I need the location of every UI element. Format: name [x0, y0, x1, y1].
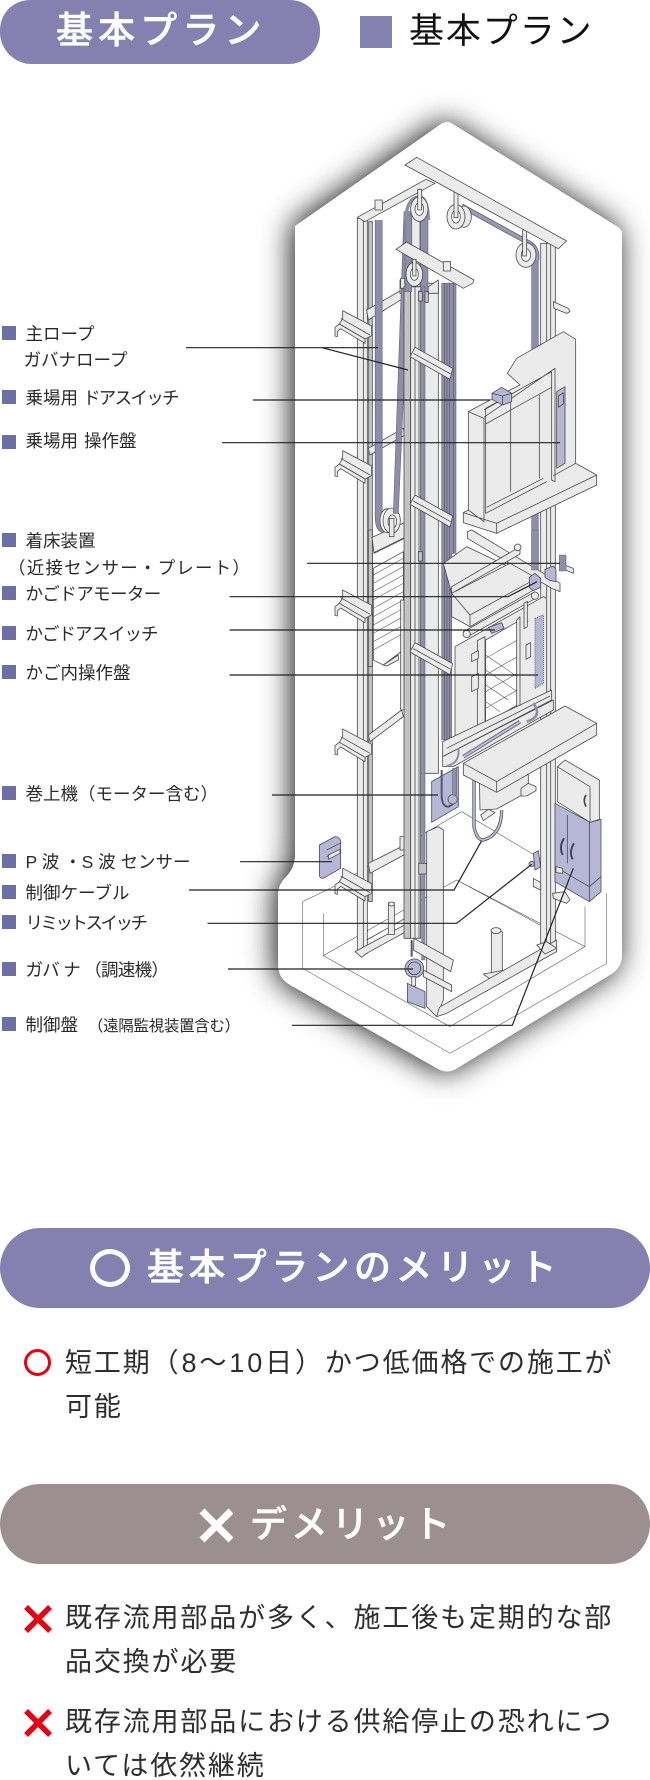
governor bracket	[413, 938, 453, 972]
leader lines	[186, 348, 573, 1025]
left rail	[357, 218, 372, 953]
merit heading pill: 基本プランのメリット	[147, 1247, 561, 1288]
label: hall door switch: 乗場用 ドアスイッチ	[26, 388, 178, 408]
label: main rope	[2, 324, 128, 370]
label: main rope: ガバナロープ	[24, 350, 127, 370]
leader: car panel	[230, 674, 538, 676]
merit item: 短工期（8～10日）かつ低価格での施工が	[65, 1348, 613, 1378]
icon: cross	[200, 1508, 234, 1542]
demerit heading pill	[0, 1484, 650, 1564]
demerit item 1	[24, 1603, 613, 1677]
shaft outline panel	[278, 122, 622, 1072]
leader: sensor	[240, 861, 332, 863]
label: car panel: かご内操作盤	[26, 662, 130, 682]
label: car door motor: かごドアモーター	[26, 584, 161, 604]
leader: control cable	[189, 841, 482, 890]
pit outline	[303, 812, 607, 1053]
label: landing device: （近接センサー・プレート）	[8, 558, 251, 578]
demerit item 1: 品交換が必要	[65, 1647, 238, 1677]
merit heading pill	[0, 1228, 650, 1308]
centre brackets	[410, 347, 453, 675]
leader: landing device	[307, 562, 560, 564]
label: control cable: 制御ケーブル	[26, 882, 129, 902]
centre rope band	[442, 283, 456, 740]
demerit heading pill: デメリット	[250, 1504, 454, 1545]
label: car door switch: かごドアスイッチ	[26, 624, 158, 644]
car floor apron and cables	[463, 706, 597, 840]
leader: hall panel	[222, 442, 560, 444]
icon: red circle	[24, 1349, 51, 1376]
leader: main rope	[186, 348, 408, 370]
governor	[409, 940, 415, 957]
elevator machinery drawing	[303, 157, 607, 1053]
label: sensor: P 波 ・S 波 センサー	[26, 852, 190, 872]
second sheave and beam	[396, 242, 474, 288]
label: landing device: 着床装置	[26, 530, 96, 550]
demerit item 1: 既存流用部品が多く、施工後も定期的な部	[65, 1603, 613, 1633]
label: hall panel: 乗場用 操作盤	[26, 430, 136, 450]
pit equipment	[319, 837, 557, 1017]
demerit item 2: 既存流用部品における供給停止の恐れにつ	[65, 1707, 613, 1737]
top rope run	[462, 206, 537, 260]
leader: car door motor	[230, 582, 537, 597]
lower column	[427, 827, 443, 1017]
label: governor: ガバ ナ （調速機）	[26, 960, 168, 980]
counterweight	[368, 508, 413, 667]
icon: red cross	[24, 1605, 52, 1633]
left rope band	[379, 220, 387, 529]
car bottom assembly	[432, 690, 553, 822]
central column	[401, 215, 438, 960]
label: landing device	[2, 530, 251, 578]
elevator shaft diagram	[186, 101, 644, 1093]
left rail base frame	[355, 910, 420, 957]
top frame beams	[357, 179, 435, 222]
leader: hall door switch	[253, 399, 490, 401]
upper hall door and wall	[463, 332, 597, 533]
right pit frame	[437, 940, 557, 1017]
section heading: 基本プラン: 基本プラン	[409, 12, 594, 51]
leader: limit switch	[208, 864, 532, 923]
leader: governor	[228, 968, 413, 970]
icon: circle	[90, 1249, 130, 1287]
leader: hoist	[272, 794, 438, 796]
merit item	[24, 1348, 613, 1422]
top beam	[405, 157, 567, 249]
buffer	[491, 932, 502, 973]
left brackets	[335, 311, 372, 901]
leader: car door switch	[230, 629, 495, 631]
sheaves	[411, 189, 536, 267]
title pill: 基本プラン	[0, 0, 320, 64]
leader: control panel	[292, 868, 573, 1025]
wall braces	[367, 280, 410, 873]
demerit item 2	[24, 1707, 613, 1780]
lower car	[443, 530, 573, 743]
label: hoist: 巻上機（モーター含む）	[26, 784, 218, 804]
title pill: 基本プラン: 基本プラン	[56, 10, 266, 51]
icon: red cross	[24, 1709, 52, 1737]
label: main rope: 主ロープ	[26, 324, 94, 344]
merit item: 可能	[65, 1392, 123, 1422]
label: limit switch: リミットスイッチ	[26, 912, 146, 932]
hoisting machine	[432, 767, 458, 822]
control panel	[529, 760, 601, 903]
tapered rope	[393, 212, 411, 513]
right rail	[532, 243, 570, 943]
label: control board: 制御盤 （遠隔監視装置含む）	[26, 1014, 240, 1034]
